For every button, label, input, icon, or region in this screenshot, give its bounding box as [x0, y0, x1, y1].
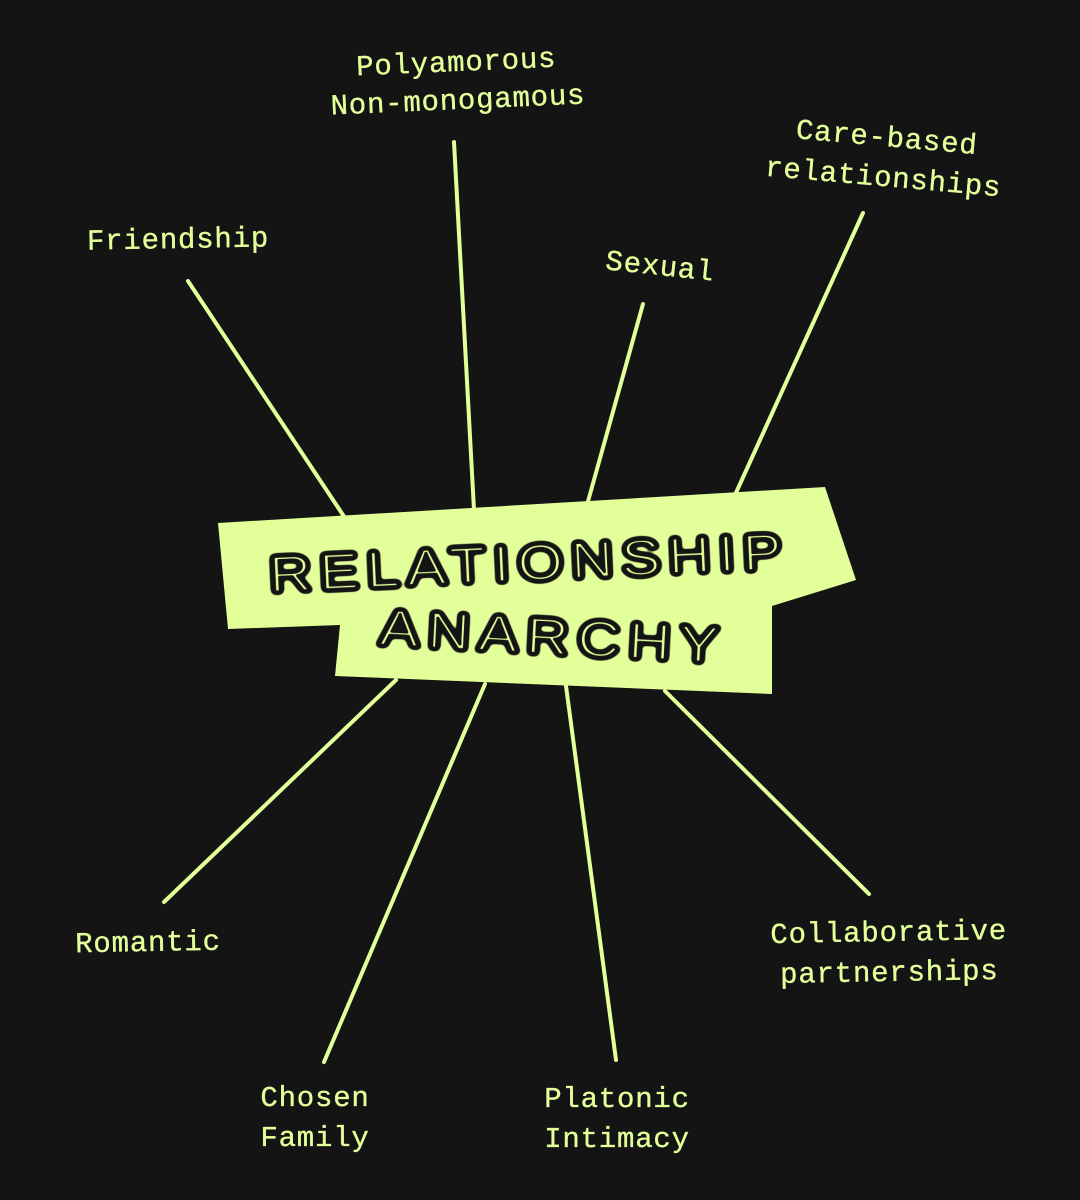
title: ANARCHY — [378, 599, 729, 674]
label: friendship: Friendship — [87, 222, 269, 259]
label: collaborative partnerships: Collaborative — [770, 915, 1007, 952]
title: RELATIONSHIP — [268, 522, 791, 603]
central banner — [218, 487, 856, 694]
label: polyamorous non-monogamous: Non-monogamous — [330, 79, 586, 124]
label: polyamorous non-monogamous — [328, 41, 586, 124]
label: care-based relationships — [764, 112, 1006, 205]
label: collaborative partnerships: partnerships — [780, 955, 999, 992]
label: sexual: Sexual — [604, 245, 716, 290]
label: platonic intimacy: Intimacy — [544, 1123, 690, 1156]
label: platonic intimacy — [544, 1083, 690, 1156]
label: chosen family: Chosen — [260, 1082, 370, 1115]
label: romantic: Romantic — [75, 926, 221, 961]
label: chosen family — [260, 1082, 370, 1155]
spoke lines — [164, 142, 869, 1062]
title — [268, 522, 791, 674]
label: care-based relationships: relationships — [764, 152, 1003, 205]
label: collaborative partnerships — [770, 915, 1008, 992]
label: polyamorous non-monogamous: Polyamorous — [356, 43, 557, 84]
label: platonic intimacy: Platonic — [544, 1083, 690, 1116]
label: care-based relationships: Care-based — [795, 114, 979, 163]
label: chosen family: Family — [260, 1122, 370, 1155]
